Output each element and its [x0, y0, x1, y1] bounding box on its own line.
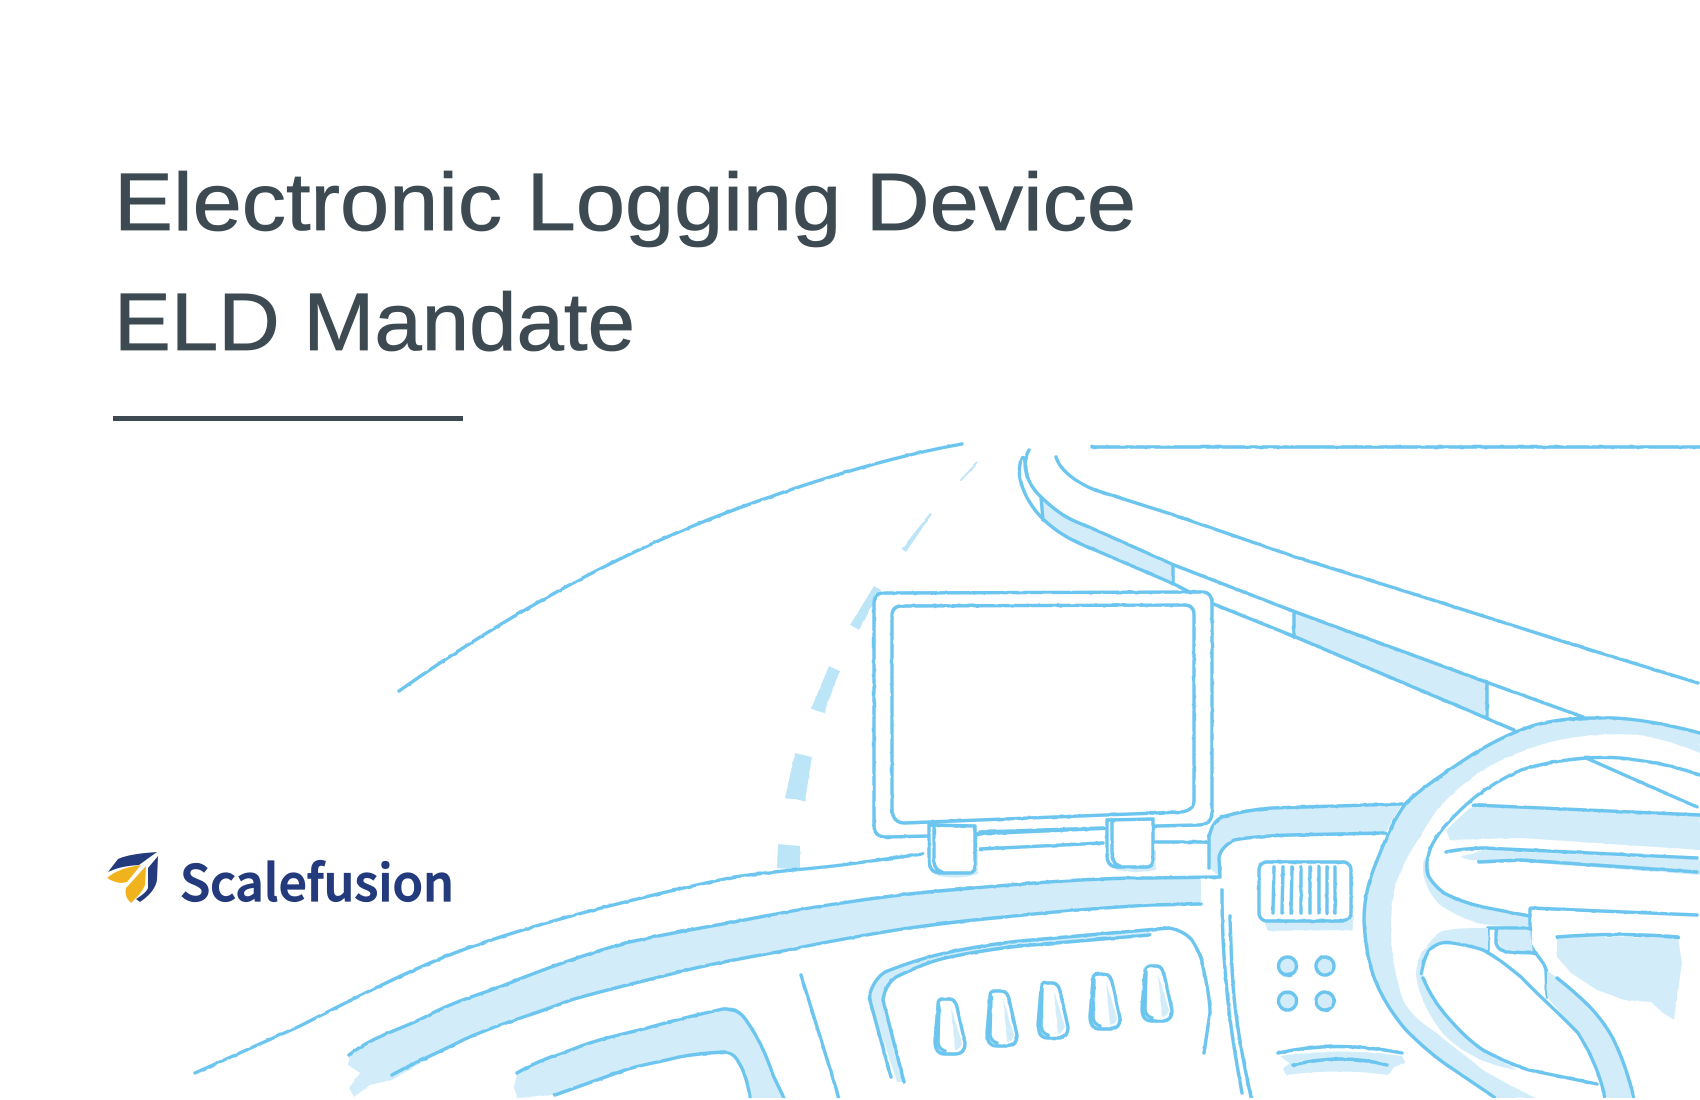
centre console: [869, 928, 1210, 1082]
lower hub lines: [1421, 942, 1605, 1097]
cab door panel patch: [1557, 937, 1682, 1020]
button 2: [987, 991, 1017, 1046]
steering wheel: [1364, 718, 1700, 1098]
left gauge hump: [514, 1009, 784, 1098]
button 5: [1142, 966, 1172, 1021]
console vertical seams: [1222, 890, 1251, 1097]
ELD screen device: [874, 592, 1212, 878]
right dash upper band: [1209, 804, 1402, 877]
screen outer frame: [874, 592, 1212, 837]
steering wheel rim: [1364, 718, 1700, 1098]
instrument cluster housing: [1530, 908, 1697, 915]
air vent: [1259, 862, 1354, 931]
hood line: [195, 854, 923, 1073]
steering column shadow: [1423, 853, 1530, 928]
dashboard top band: [348, 877, 1219, 1097]
console buttons: [935, 966, 1172, 1054]
steering wheel inner edge: [1427, 757, 1700, 916]
road centre dashes: [777, 463, 977, 870]
dashboard diagonal seam: [801, 975, 839, 1098]
button 1: [935, 999, 965, 1054]
button 4: [1090, 974, 1120, 1029]
title: ELD Mandate: [114, 277, 635, 368]
console round knobs: [1278, 957, 1334, 1010]
logo: Scalefusion: [107, 844, 454, 916]
screen mounts: [929, 819, 1206, 878]
console lower arcs: [1278, 1046, 1405, 1075]
icon: logo mark: [107, 852, 158, 903]
lower hub shadow: [1416, 928, 1517, 1070]
title: [114, 157, 1136, 368]
screen inner panel: [892, 605, 1194, 823]
horizon line: [1092, 445, 1700, 449]
button 3: [1038, 983, 1068, 1038]
illustration: truck cab view of the road: [195, 444, 1700, 1098]
windscreen band: [1446, 805, 1700, 850]
road right edge and median: [1019, 450, 1698, 730]
title: Electronic Logging Device: [114, 157, 1136, 248]
logo wordmark: Scalefusion: [180, 844, 454, 916]
road left edge: [399, 444, 962, 691]
title underline: [113, 416, 463, 421]
